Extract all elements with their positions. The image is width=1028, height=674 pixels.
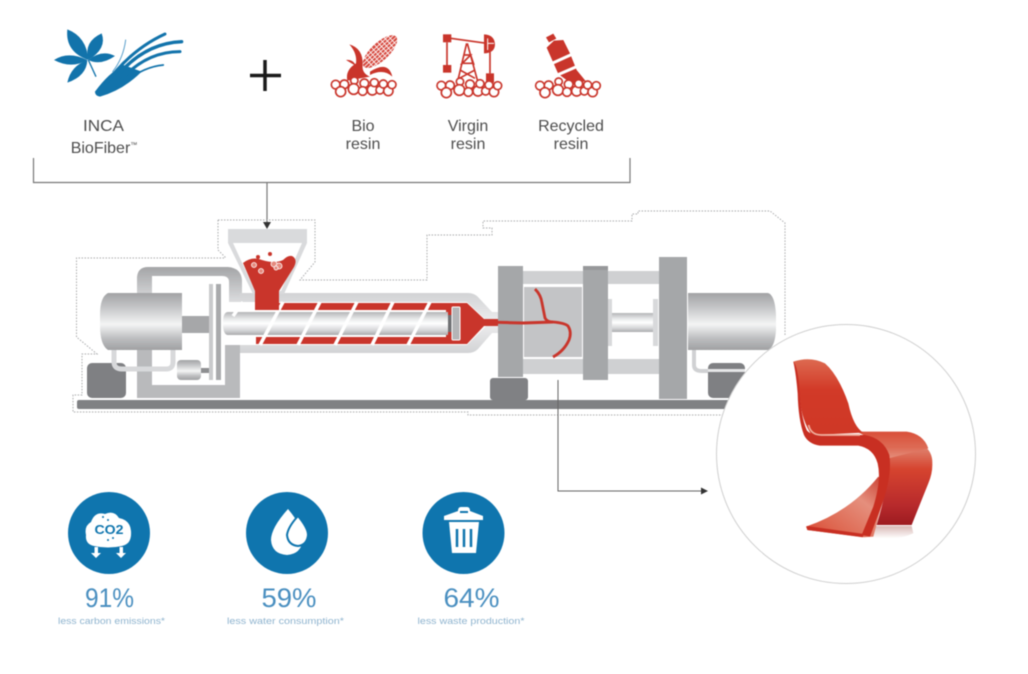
dark block left [87, 363, 126, 398]
hopper [228, 229, 307, 294]
icon: corn bio resin [331, 29, 403, 97]
value: 64% [444, 583, 500, 613]
icon: red chair [793, 359, 932, 539]
caption: less water consumption* [227, 616, 345, 626]
icon: trash bin [444, 507, 483, 553]
left motor [100, 293, 182, 350]
stat: waste production [418, 492, 525, 626]
icon: water drops [271, 509, 308, 555]
motor shaft [182, 316, 210, 333]
screw tip [448, 307, 460, 340]
label: BioFiber: ™ [130, 142, 137, 149]
platen foot [490, 378, 528, 400]
white gap around screw [256, 310, 446, 337]
bracket and arrow to hopper [34, 158, 630, 229]
fixed platen [498, 266, 523, 377]
small cylinder [177, 360, 201, 380]
arrow: mould to product [558, 380, 708, 494]
right block [708, 363, 745, 398]
label: Virgin resin: resin [451, 136, 485, 153]
label: Virgin resin: Virgin [448, 118, 488, 135]
drive plates [209, 284, 221, 380]
panel: inputs row [54, 29, 604, 157]
blue circle [68, 492, 150, 574]
rear platen [659, 257, 687, 399]
upper tie bar [523, 271, 659, 284]
top return pipe [137, 267, 242, 302]
left support frame [137, 345, 240, 398]
value: 59% [262, 583, 316, 613]
icon: INCA BioFiber leaf and fibres [54, 29, 182, 97]
motor pipes [114, 350, 173, 369]
machine base [77, 400, 737, 409]
right pipe [694, 350, 712, 371]
screw flights [233, 302, 430, 345]
label: Bio resin: Bio [351, 118, 375, 135]
label: Recycled resin: Recycled [538, 118, 604, 135]
stat: carbon emissions [58, 492, 166, 626]
resin in hopper [243, 252, 296, 310]
guide rod [608, 299, 658, 346]
stat: water consumption [227, 492, 345, 626]
mould cavity [524, 287, 582, 357]
screw shaft [223, 312, 448, 335]
injection moulding machine [77, 229, 776, 409]
right cylinder [688, 293, 776, 350]
panel: product circle [716, 324, 976, 584]
icon: plus sign [250, 60, 281, 91]
barrel [240, 293, 508, 353]
caption: less carbon emissions* [58, 616, 166, 626]
blue circle [422, 492, 504, 574]
icon: CO2 cloud: CO2 [94, 522, 124, 537]
dotted machine outline [73, 211, 785, 415]
blue circle [246, 492, 328, 574]
lower tie bar [523, 359, 659, 374]
label: Recycled resin: resin [554, 136, 588, 153]
caption: less waste production* [418, 616, 525, 626]
label: INCA: INCA [83, 118, 124, 135]
label: Bio resin: resin [346, 136, 380, 153]
value: 91% [85, 583, 134, 613]
icon: oil pump virgin resin [437, 34, 502, 98]
small shaft [201, 368, 210, 373]
label: BioFiber: BioFiber [71, 140, 130, 157]
resin stream into mould [484, 289, 570, 357]
barrel interior [238, 302, 500, 345]
icon: bottle recycled resin [536, 34, 600, 98]
hopper opening [233, 243, 302, 291]
molten resin [256, 303, 500, 344]
moving platen [583, 266, 608, 380]
